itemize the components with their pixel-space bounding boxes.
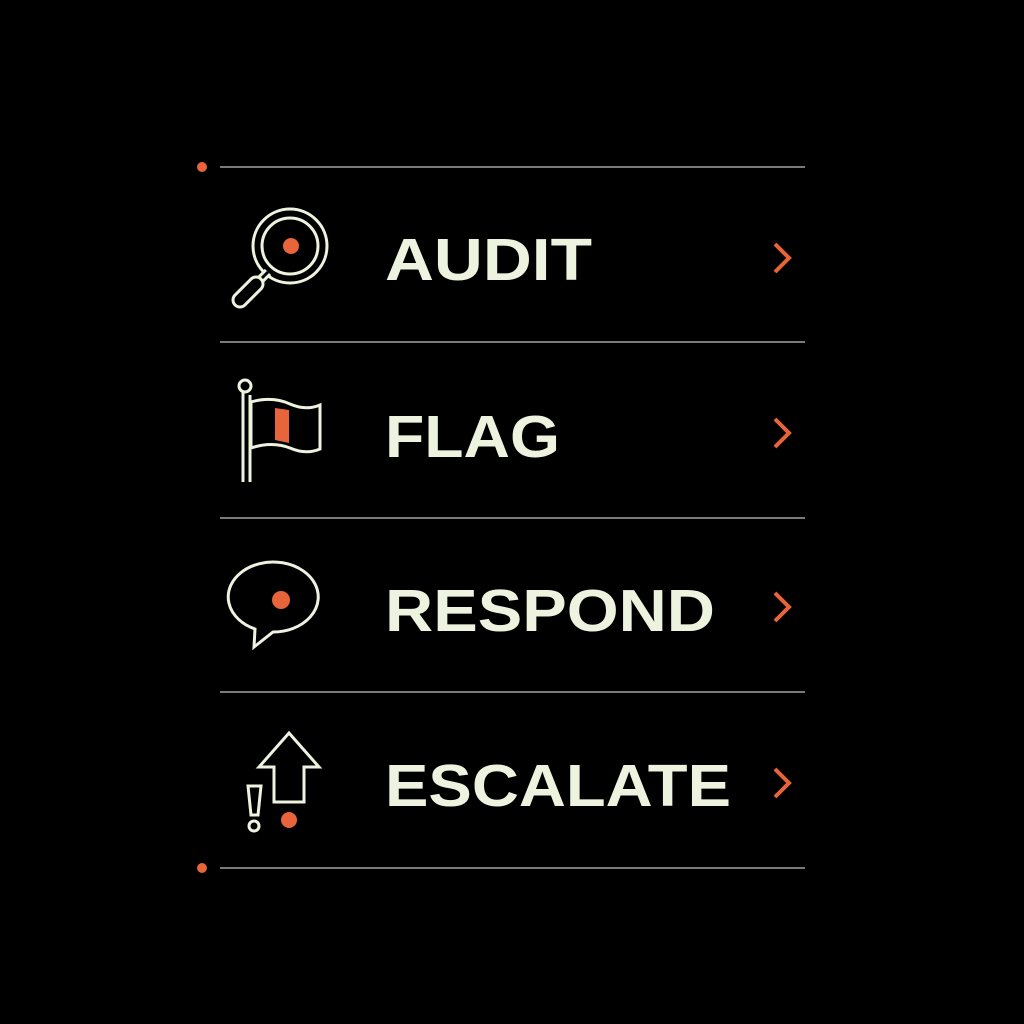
chevron xyxy=(775,769,789,797)
chevron xyxy=(775,244,789,272)
row: respond xyxy=(228,562,789,647)
label: FLAG: FLAG xyxy=(385,404,560,470)
icon: speech bubble xyxy=(228,562,318,647)
label: ESCALATE: ESCALATE xyxy=(385,753,731,819)
row: escalate xyxy=(248,733,789,831)
icon: magnifier xyxy=(240,209,327,300)
chevron xyxy=(775,593,789,621)
row: audit xyxy=(240,209,789,300)
marker dot top xyxy=(197,162,207,172)
chevron xyxy=(775,419,789,447)
label: AUDIT: AUDIT xyxy=(385,227,592,293)
icon: escalate arrow xyxy=(248,733,319,831)
marker dot bottom xyxy=(197,863,207,873)
label: RESPOND: RESPOND xyxy=(385,578,715,644)
row: flag xyxy=(239,380,789,482)
icon: flag xyxy=(239,380,320,482)
